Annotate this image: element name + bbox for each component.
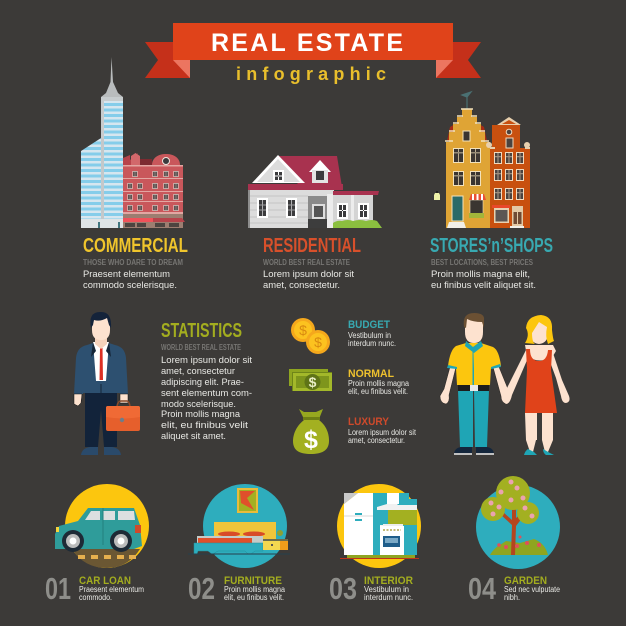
text: luxury: Lorem ipsum dolor sit [348,428,417,437]
illustration: couple [440,313,570,455]
label: budget: BUDGET [348,319,390,331]
illustration: car in circle [55,484,149,568]
text: statistics: Proin mollis magna [161,409,241,420]
text: budget: Vestibulum in [348,331,391,340]
text: garden: nibh. [504,593,520,602]
subheading: residential: WORLD BEST REAL ESTATE [263,258,351,267]
text: residential [263,269,354,291]
text: normal [348,379,409,396]
text: statistics: adipiscing elit. Prae- [161,377,244,388]
text: statistics: amet, consectetur [161,366,235,377]
text: car loan: Praesent elementum [79,585,144,594]
title banner [145,23,481,78]
text: stores and shops: eu finibus velit aliquet sit. [431,280,536,291]
icon: money bag: $ [304,426,318,454]
text: garden [504,585,560,602]
illustration: businessman [74,312,140,455]
text: furniture [224,585,285,602]
number: 01: 01 [45,571,71,606]
label: luxury: LUXURY [348,416,390,428]
icon: coins: $ [299,322,307,338]
number: 03: 03 [329,571,357,606]
illustration: commercial buildings [81,57,185,228]
text: interior [364,585,413,602]
text: furniture: Proin mollis magna [224,585,285,594]
text: garden: Sed nec vulputate [504,585,560,594]
text: car loan: commodo. [79,593,112,602]
text: stores and shops [431,269,536,291]
heading: stores and shops: STORES’n’SHOPS [430,235,553,257]
text: interior: interdum nunc. [364,593,413,602]
label: garden: GARDEN [504,575,547,587]
label: normal: NORMAL [348,368,394,380]
text: commercial: Praesent elementum [83,269,170,280]
heading: commercial: COMMERCIAL [83,235,188,257]
text: car loan [79,585,144,602]
icon: money bag [293,409,329,454]
icon: banknotes: $ [309,374,317,390]
text: commercial: commodo scelerisque. [83,280,177,291]
label: interior: INTERIOR [364,575,413,587]
illustration: furniture in circle [188,484,290,568]
text: budget [348,331,396,348]
text: statistics: sent elementum com- [161,388,252,399]
subheading: statistics: WORLD BEST REAL ESTATE [161,343,241,352]
text: stores and shops: Proin mollis magna elit, [431,269,530,280]
subheading: stores and shops: BEST LOCATIONS, BEST PRICES [431,258,534,267]
icon: coins [291,318,330,354]
text: statistics: elit, eu finibus velit [161,420,248,431]
subheading: commercial: THOSE WHO DARE TO DREAM [83,258,183,267]
heading: residential: RESIDENTIAL [263,235,361,257]
text: luxury: amet, consectetur. [348,436,405,445]
text: normal: elit, eu finibus velit. [348,387,408,396]
illustration: house [248,155,382,228]
illustration: stores and shops [434,92,530,228]
text: normal: Proin mollis magna [348,379,409,388]
number: 04: 04 [468,571,497,606]
illustration: kitchen interior in circle [337,484,421,568]
text: statistics: Lorem ipsum dolor sit [161,355,252,366]
subtitle: infographic [236,64,386,84]
text: interior: Vestibulum in [364,585,409,594]
label: furniture: FURNITURE [224,575,282,587]
text: residential: Lorem ipsum dolor sit [263,269,354,280]
icon: banknotes [289,369,332,391]
text: statistics [161,355,252,442]
text: commercial [83,269,177,291]
text: residential: amet, consectetur. [263,280,340,291]
icon: coins: $ [314,334,322,350]
title: REAL ESTATE [211,29,403,57]
text: luxury [348,428,417,445]
heading: statistics: STATISTICS [161,320,242,342]
text: statistics: modo scelerisque. [161,399,236,410]
illustration: garden tree in circle [476,476,560,569]
text: budget: interdum nunc. [348,339,396,348]
label: car loan: CAR LOAN [79,575,131,587]
number: 02: 02 [188,571,215,606]
text: furniture: elit, eu finibus velit. [224,593,284,602]
text: statistics: aliquet sit amet. [161,431,226,442]
